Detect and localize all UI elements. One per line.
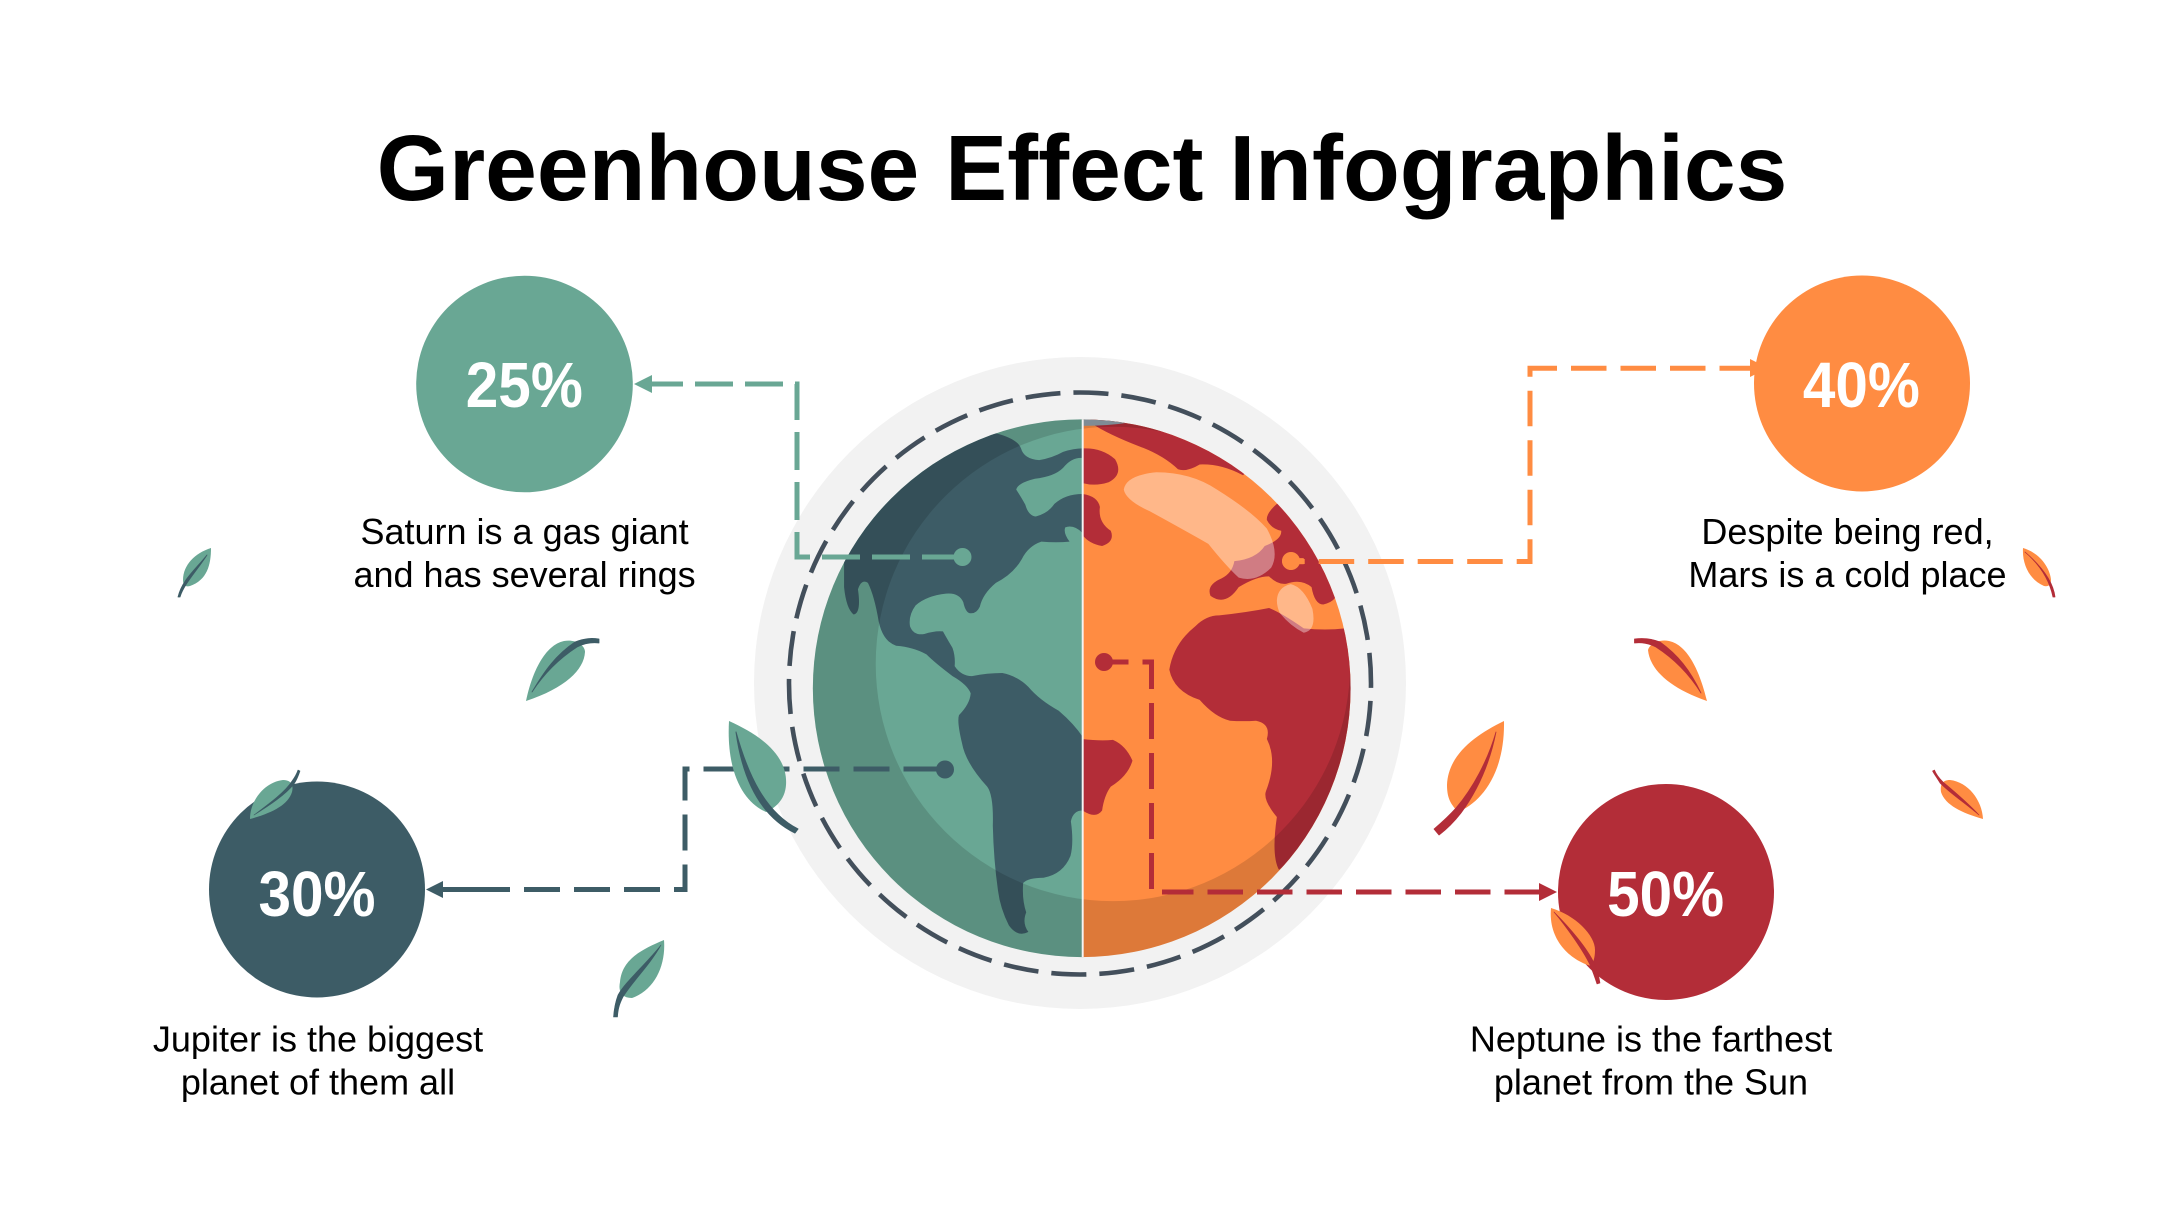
connector: 30% teal <box>426 760 954 898</box>
stat circle: 50% <box>1558 784 1774 1000</box>
globe backdrop circle <box>754 357 1406 1009</box>
leaf: orange on 50% circle <box>1551 908 1600 984</box>
leaf: green tiny left <box>178 548 211 597</box>
text: Jupiter: planet of them all <box>181 1062 455 1103</box>
globe <box>801 407 1364 969</box>
text: Mars: Mars is a cold place <box>1688 554 2007 595</box>
text: Saturn: Saturn is a gas giant <box>360 511 689 552</box>
leaf: large orange <box>1434 721 1504 835</box>
text: Jupiter: Jupiter is the biggest <box>153 1018 483 1060</box>
connector: 25% green <box>634 375 972 566</box>
leaf: orange tiny right <box>2023 548 2055 597</box>
stat circle: 40%: 40% <box>1803 349 1920 421</box>
stat circle: 30% <box>209 782 425 998</box>
stat circle: 40% <box>1754 276 1970 492</box>
stat circle: 25%: 25% <box>466 349 583 421</box>
leaf: green upper <box>526 638 599 701</box>
dashed orbit ring <box>772 375 1388 992</box>
connector: 40% orange <box>1282 359 1768 570</box>
leaf: green on 30% circle <box>250 770 300 819</box>
text: Saturn: and has several rings <box>353 554 696 595</box>
leaf: green lower <box>614 940 664 1017</box>
leaf: orange lower right <box>1932 770 1983 819</box>
stat circle: 25% <box>416 276 633 492</box>
title: Greenhouse Effect Infographics <box>377 116 1787 220</box>
leaf: large green <box>729 721 798 833</box>
text: Neptune: planet from the Sun <box>1494 1062 1808 1103</box>
stat circle: 50%: 50% <box>1607 858 1724 930</box>
text: Neptune: Neptune is the farthest <box>1470 1018 1832 1060</box>
leaf: orange upper <box>1634 638 1707 701</box>
connector: 50% red <box>1095 653 1557 901</box>
stat circle: 30%: 30% <box>258 858 376 930</box>
text: Mars: Despite being red, <box>1701 511 1994 552</box>
